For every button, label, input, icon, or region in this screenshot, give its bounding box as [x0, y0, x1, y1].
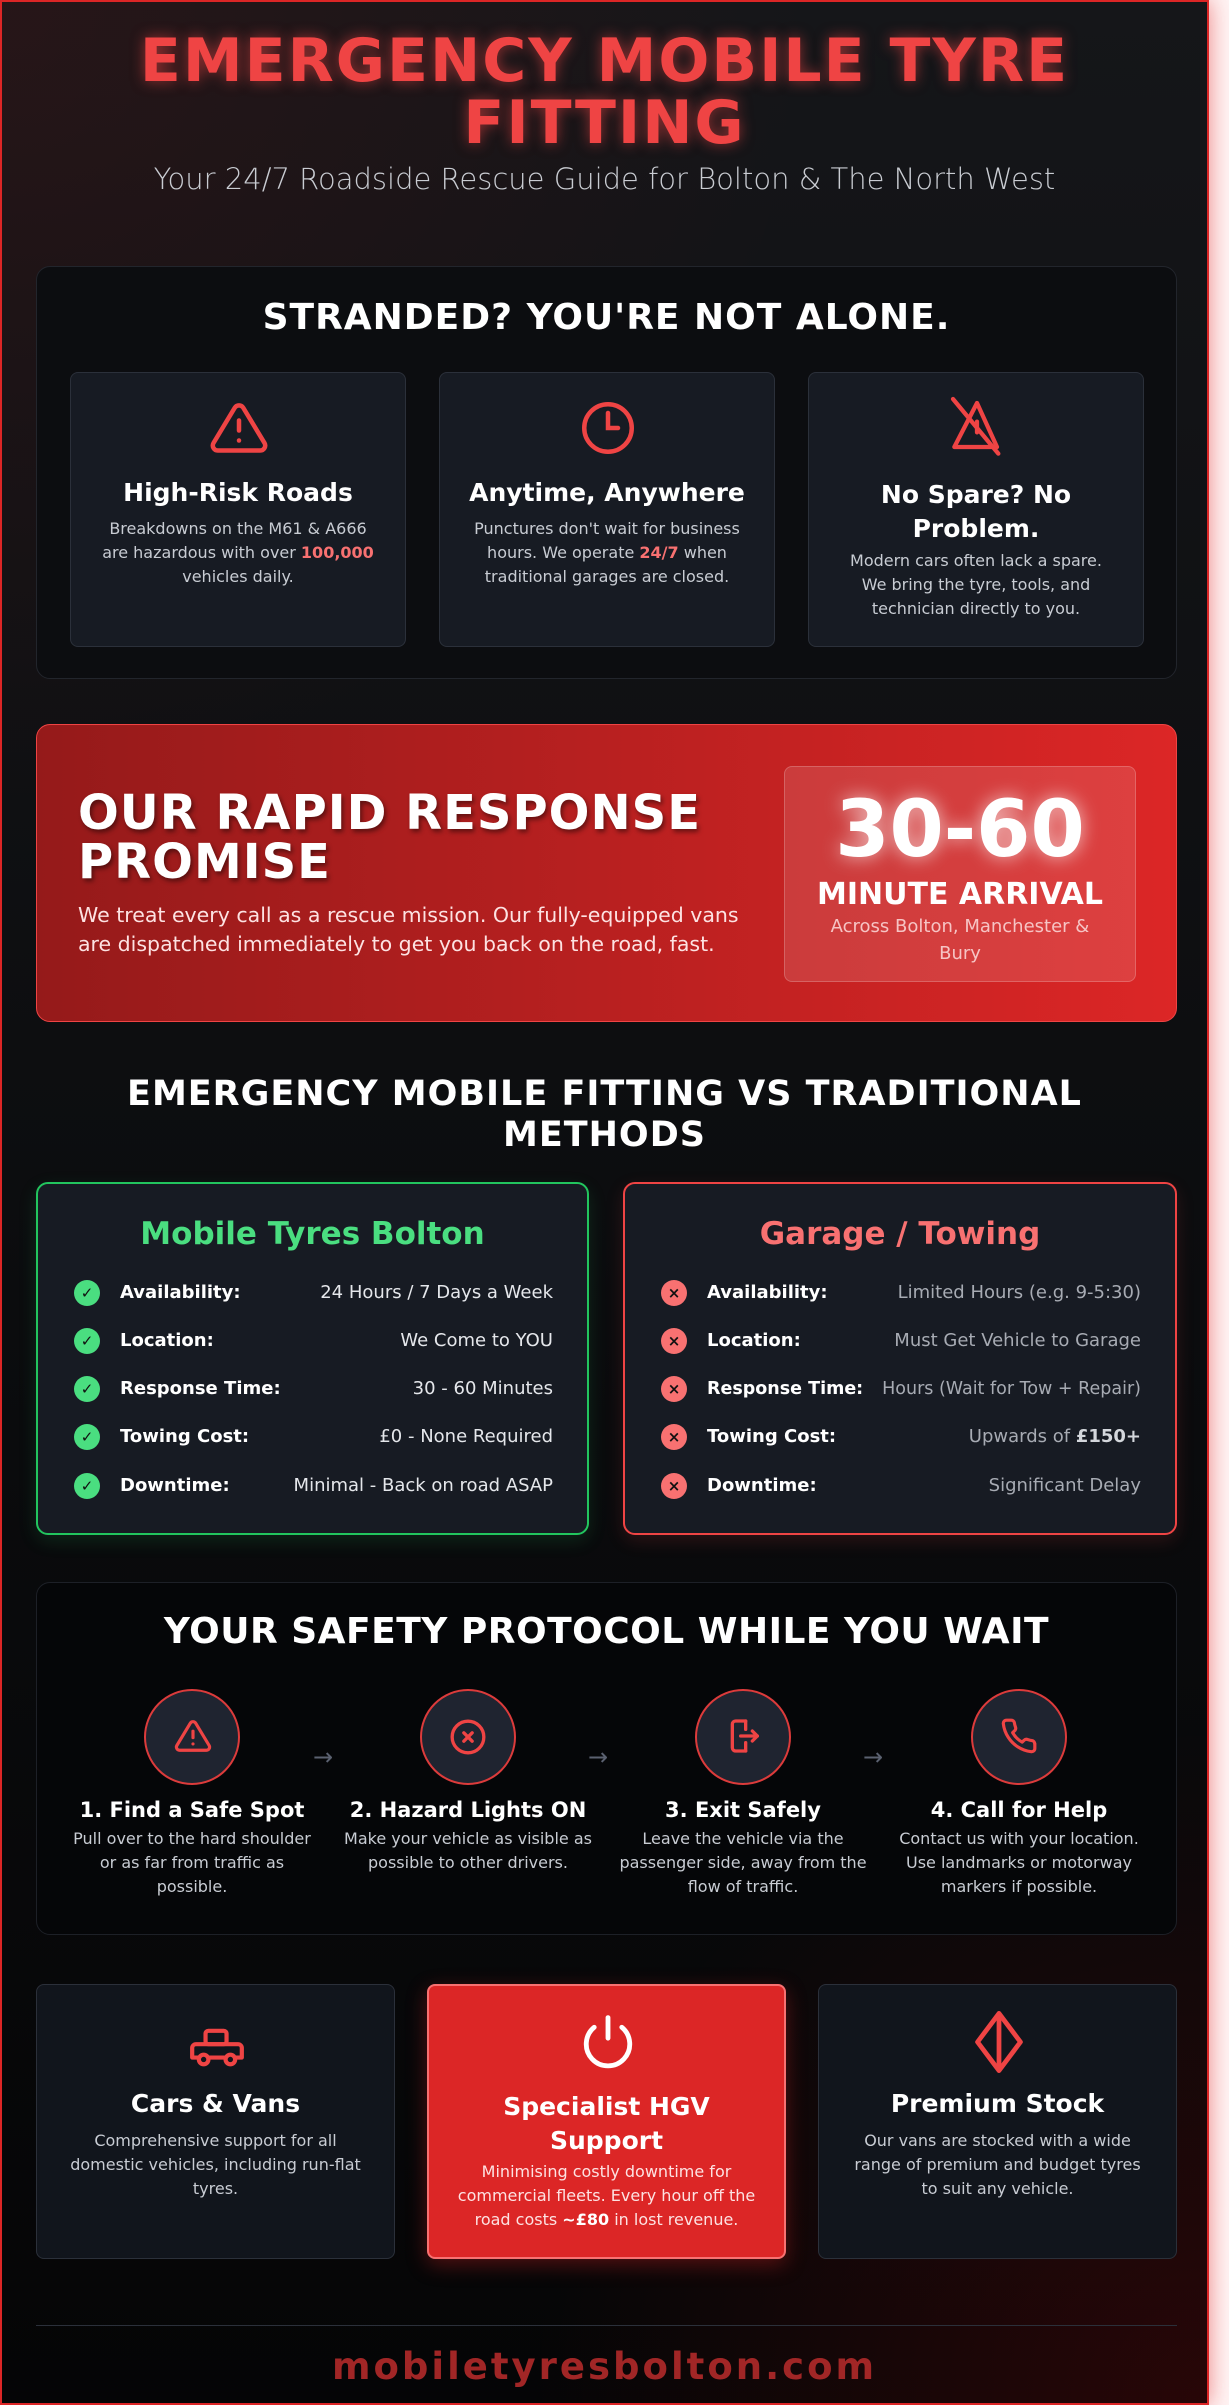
- callout: 30-60 minute arrival: Across Bolton, Manchester & Bury: [831, 916, 1089, 964]
- step 4 text: Contact us with your location. Use landmarks or motorway markers if possible.: [899, 1829, 1139, 1896]
- row: location: ✓: [81, 1332, 93, 1350]
- row: response: Response Time:: [120, 1378, 281, 1399]
- card: premium stock: Premium Stock: [891, 2089, 1104, 2118]
- callout: 30-60 minute arrival: [784, 766, 1136, 982]
- row: location: Location:: [707, 1330, 801, 1351]
- card: anytime: [439, 372, 775, 647]
- card: cars & vans: [36, 1984, 395, 2259]
- text: promise body: We treat every call as a rescue mission. Our fully-equipped vans are dispatched immediately to get you back on the road, fast.: [78, 903, 739, 956]
- step 3 text: Leave the vehicle via the passenger side, away from the flow of traffic.: [619, 1829, 867, 1896]
- panel: mobile tyres bolton: [36, 1182, 589, 1535]
- icon: step 3: [695, 1689, 791, 1785]
- row: towing: Upwards of £150+: [969, 1426, 1141, 1447]
- arrow 1: →: [313, 1743, 333, 1771]
- card: no spare: Problem.: [913, 514, 1039, 543]
- step 3 text: [619, 1798, 867, 1896]
- card: no spare: [808, 372, 1144, 647]
- heading: promise: PROMISE: [78, 834, 331, 890]
- step 2 text: [344, 1798, 592, 1872]
- row: location: Location:: [120, 1330, 214, 1351]
- row: location: We Come to YOU: [400, 1330, 553, 1351]
- icon: crossed warning: [950, 396, 1000, 456]
- row: response: ✓: [81, 1380, 93, 1398]
- card: premium stock: [818, 1984, 1177, 2259]
- card: high-risk roads: [70, 372, 406, 647]
- row: location: [661, 1328, 1141, 1354]
- title: [136, 26, 1070, 158]
- row: response: Hours (Wait for Tow + Repair): [882, 1379, 1141, 1399]
- icon: car: [190, 2028, 244, 2066]
- footer: website: mobiletyresbolton.com: [332, 2345, 877, 2388]
- arrow 3: →: [863, 1743, 883, 1771]
- step 1 text: Pull over to the hard shoulder or as far from traffic as possible.: [73, 1829, 311, 1896]
- heading: promise: OUR RAPID RESPONSE: [78, 785, 701, 841]
- row: towing: [661, 1424, 1141, 1450]
- card: anytime: Anytime, Anywhere: [469, 478, 745, 507]
- step 1 text: [73, 1798, 311, 1896]
- row: downtime: Significant Delay: [989, 1475, 1141, 1496]
- heading: safety: YOUR SAFETY PROTOCOL WHILE YOU WAIT: [164, 1611, 1049, 1652]
- card: high-risk roads: High-Risk Roads: [123, 478, 353, 507]
- card: no spare: Modern cars often lack a spare. We bring the tyre, tools, and technician directly to you.: [850, 551, 1102, 618]
- arrow 2: →: [588, 1743, 608, 1771]
- row: downtime: Downtime:: [120, 1475, 230, 1496]
- row: availability: Availability:: [120, 1282, 241, 1303]
- row: availability: 24 Hours / 7 Days a Week: [320, 1282, 553, 1303]
- panel: stranded: [36, 266, 1177, 679]
- row: availability: ✓: [81, 1284, 93, 1302]
- row: location: ×: [668, 1332, 680, 1350]
- heading: promise: [78, 785, 702, 890]
- title: FITTING: [463, 88, 746, 158]
- row: downtime: Downtime:: [707, 1475, 817, 1496]
- panel: rapid response promise: [36, 724, 1177, 1022]
- step 4 text: [899, 1798, 1139, 1896]
- row: towing: £0 - None Required: [379, 1426, 553, 1447]
- row: response: 30 - 60 Minutes: [413, 1378, 553, 1399]
- row: availability: [661, 1280, 1141, 1306]
- heading: comparison: METHODS: [503, 1115, 706, 1155]
- card: specialist hgv: Specialist HGV: [503, 2092, 710, 2121]
- card: specialist hgv: Support: [550, 2126, 663, 2155]
- step 1 text: 1. Find a Safe Spot: [80, 1798, 304, 1822]
- heading: comparison: EMERGENCY MOBILE FITTING VS TRADITIONAL: [127, 1074, 1082, 1114]
- row: towing: ×: [668, 1428, 680, 1446]
- panel: garage towing: Garage / Towing: [760, 1216, 1040, 1252]
- callout: 30-60 minute arrival: 30-60: [835, 785, 1085, 875]
- card: specialist hgv: [427, 1984, 786, 2259]
- row: response: ×: [668, 1380, 680, 1398]
- row: response: [74, 1376, 553, 1402]
- card: premium stock: Our vans are stocked with a wide range of premium and budget tyres to suit any vehicle.: [854, 2131, 1141, 2198]
- heading: comparison: [127, 1074, 1082, 1155]
- row: availability: Limited Hours (e.g. 9-5:30): [898, 1282, 1141, 1303]
- row: downtime: [661, 1473, 1141, 1499]
- row: towing: Towing Cost:: [707, 1426, 836, 1447]
- icon: step 2: [420, 1689, 516, 1785]
- row: downtime: Minimal - Back on road ASAP: [294, 1475, 553, 1496]
- panel: garage towing: [623, 1182, 1177, 1535]
- title: EMERGENCY MOBILE TYRE: [140, 26, 1069, 96]
- card: cars & vans: Comprehensive support for all domestic vehicles, including run-flat tyres.: [70, 2131, 361, 2198]
- icon: diamond: [975, 2011, 1023, 2073]
- row: response: Response Time:: [707, 1379, 863, 1399]
- step 3 text: 3. Exit Safely: [665, 1798, 821, 1822]
- icon: warning: [210, 403, 268, 453]
- icon: clock: [582, 402, 634, 454]
- card: no spare: No Spare? No: [881, 480, 1071, 509]
- row: downtime: ×: [668, 1477, 680, 1495]
- card: cars & vans: Cars & Vans: [131, 2089, 300, 2118]
- card: specialist hgv: Minimising costly downtime for commercial fleets. Every hour off the road costs ~£80 in lost revenue.: [458, 2162, 755, 2229]
- callout: 30-60 minute arrival: MINUTE ARRIVAL: [817, 877, 1103, 912]
- panel: safety protocol: [36, 1582, 1177, 1935]
- row: downtime: ✓: [81, 1477, 93, 1495]
- row: availability: Availability:: [707, 1282, 828, 1303]
- step 2 text: 2. Hazard Lights ON: [350, 1798, 586, 1822]
- card: anytime: Punctures don't wait for business hours. We operate 24/7 when traditional garages are closed.: [474, 519, 740, 586]
- row: availability: ×: [668, 1284, 680, 1302]
- panel: mobile tyres bolton: Mobile Tyres Bolton: [140, 1216, 485, 1252]
- subtitle: Your 24/7 Roadside Rescue Guide for Bolton & The North West: [154, 162, 1055, 196]
- row: availability: [74, 1280, 553, 1306]
- icon: power: [584, 2015, 632, 2068]
- icon: step 4: [971, 1689, 1067, 1785]
- row: response: [661, 1376, 1141, 1402]
- row: towing: ✓: [81, 1428, 93, 1446]
- row: location: Must Get Vehicle to Garage: [894, 1330, 1141, 1351]
- heading: stranded: STRANDED? YOU'RE NOT ALONE.: [263, 297, 950, 338]
- step 4 text: 4. Call for Help: [931, 1798, 1107, 1822]
- card: high-risk roads: Breakdowns on the M61 & A666 are hazardous with over 100,000 vehicles daily.: [102, 519, 374, 586]
- step 2 text: Make your vehicle as visible as possible to other drivers.: [344, 1829, 592, 1872]
- icon: step 1: [144, 1689, 240, 1785]
- row: downtime: [74, 1473, 553, 1499]
- row: towing: [74, 1424, 553, 1450]
- row: location: [74, 1328, 553, 1354]
- row: towing: Towing Cost:: [120, 1426, 249, 1447]
